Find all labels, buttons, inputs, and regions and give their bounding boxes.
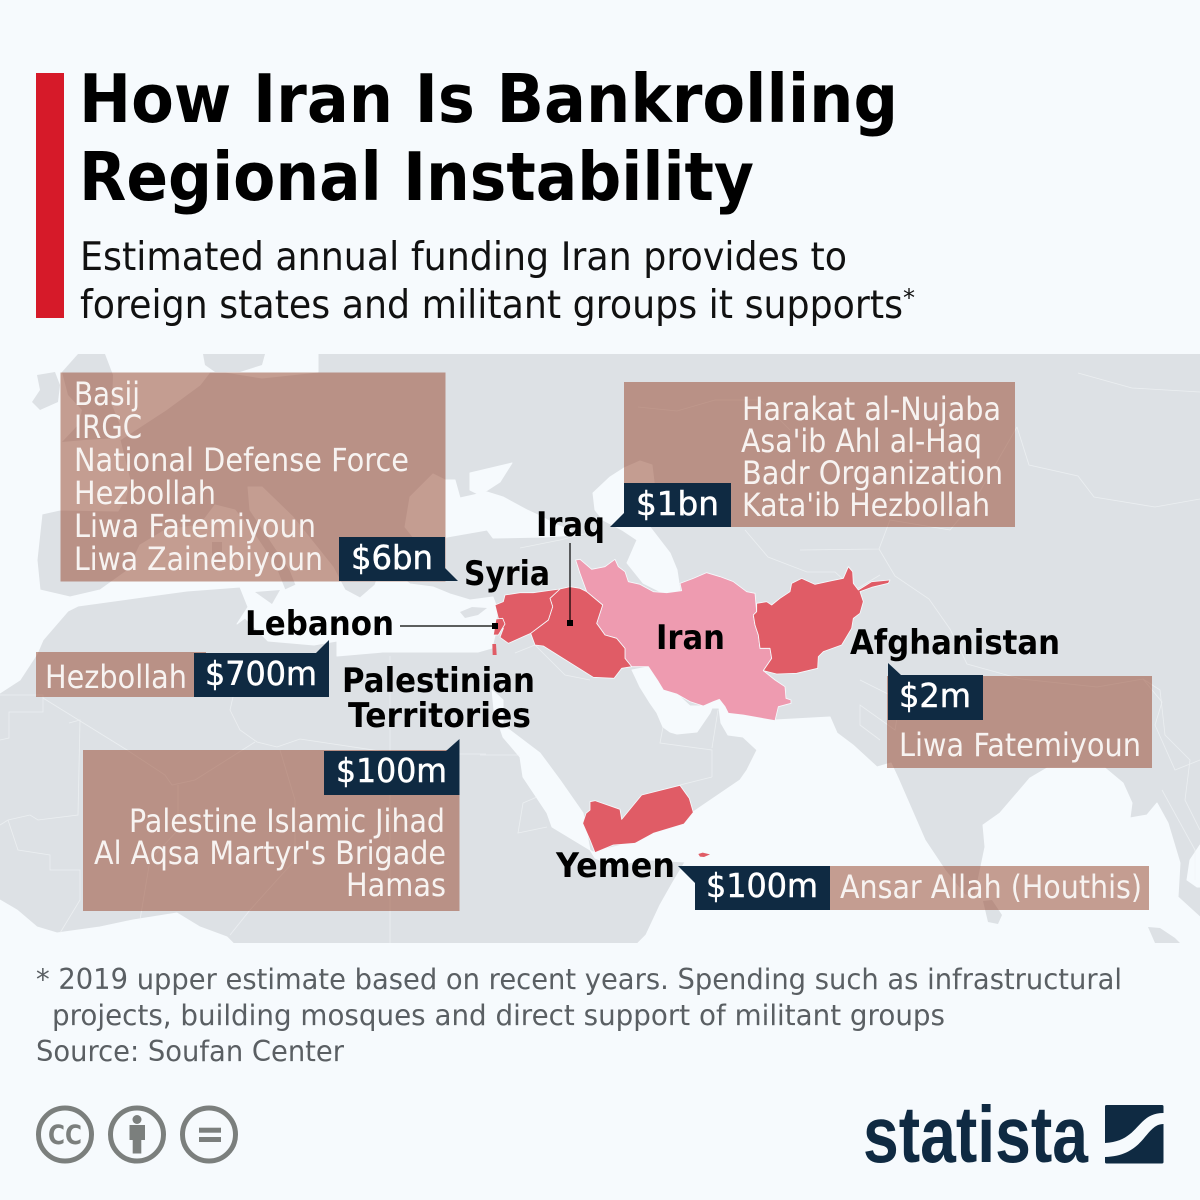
map: background land and seas [0, 354, 1200, 943]
Iraq [531, 587, 632, 678]
label: Iraq with leader line: Iraq [536, 505, 605, 545]
panel: Syria groups: Hezbollah [74, 474, 216, 512]
panel: Syria groups: Liwa Fatemiyoun [74, 507, 316, 545]
callout: Iraq $1bn [610, 483, 731, 527]
label: Palestinian Territories: Territories [348, 696, 531, 736]
footnote and source: * 2019 upper estimate based on recent years. Spending such as infrastructural [36, 963, 1122, 996]
Socotra [698, 853, 710, 857]
title: Regional Instability [79, 138, 754, 216]
panel: Palestinian groups: Palestine Islamic Jihad [129, 802, 445, 840]
callout: Syria $6bn [339, 537, 458, 581]
footnote and source: Source: Soufan Center [36, 1035, 344, 1068]
logo: statista wordmark: statista [863, 1090, 1088, 1179]
panel: Palestinian groups: Al Aqsa Martyr's Brigade [94, 834, 446, 872]
icon: attribution [110, 1108, 164, 1161]
panel: Yemen groups: Ansar Allah (Houthis) [840, 868, 1142, 906]
label: Iran: Iran [656, 618, 725, 658]
callout: Palestinian $100m: $100m [336, 751, 447, 790]
callout: Afghanistan $2m [888, 663, 983, 720]
label: Syria: Syria [464, 554, 550, 594]
callout: Afghanistan $2m: $2m [899, 676, 971, 715]
label: Palestinian Territories [342, 661, 535, 736]
callout: Syria $6bn: $6bn [351, 538, 433, 577]
logo: statista mark [1105, 1105, 1164, 1164]
panel: Iraq groups: Harakat al-Nujaba [742, 390, 1001, 428]
Afghanistan [753, 567, 890, 674]
footnote and source [36, 963, 1122, 1068]
panel: Palestinian groups [83, 750, 460, 911]
Syria [495, 589, 560, 643]
label: Lebanon with leader line: Lebanon [245, 604, 394, 644]
subtitle: foreign states and militant groups it supports [80, 283, 903, 328]
label: Lebanon with leader line [245, 604, 498, 644]
panel: Syria groups: IRGC [74, 408, 142, 446]
panel: Afghanistan groups: Liwa Fatemiyoun [899, 726, 1141, 764]
callout: Yemen $100m: $100m [706, 866, 818, 905]
icon: no derivatives [182, 1108, 236, 1161]
panel: Syria groups: Liwa Zainebiyoun [74, 540, 323, 578]
panel: Iraq groups: Kata'ib Hezbollah [742, 486, 990, 524]
title: How Iran Is Bankrolling [79, 60, 898, 138]
subtitle [80, 235, 915, 328]
callout: Palestinian $100m [324, 739, 460, 795]
Yemen [583, 785, 693, 853]
label: Yemen: Yemen [555, 846, 675, 886]
icon: creative commons [38, 1108, 92, 1161]
icon: creative commons: CC [48, 1120, 82, 1151]
footnote and source: projects, building mosques and direct support of militant groups [52, 999, 945, 1032]
Palestinian Territories [492, 644, 497, 655]
highlighted countries [492, 559, 890, 857]
callout: Lebanon $700m [194, 640, 329, 697]
label: Afghanistan: Afghanistan [850, 623, 1060, 663]
label: Palestinian Territories: Palestinian [342, 661, 535, 701]
panel: Lebanon groups: Hezbollah [45, 658, 187, 696]
panel: Iraq groups: Asa'ib Ahl al-Haq [741, 422, 982, 460]
panel: Palestinian groups: Hamas [346, 866, 446, 904]
red accent bar [36, 73, 64, 318]
panel: Syria groups: National Defense Force [74, 441, 409, 479]
title [79, 60, 898, 216]
Iran [576, 559, 791, 721]
subtitle: * [903, 284, 915, 312]
subtitle: Estimated annual funding Iran provides to [80, 235, 847, 280]
panel: Afghanistan groups [887, 676, 1152, 768]
panel: Syria groups [60, 372, 446, 582]
panel: Iraq groups: Badr Organization [742, 454, 1003, 492]
callout: Lebanon $700m: $700m [205, 654, 317, 693]
callout: Yemen $100m [678, 866, 830, 910]
panel: Iraq groups [624, 382, 1015, 527]
Lebanon [493, 618, 505, 635]
panel: Syria groups: Basij [74, 375, 140, 413]
label: Iraq with leader line [536, 505, 605, 626]
callout: Iraq $1bn: $1bn [636, 484, 719, 523]
